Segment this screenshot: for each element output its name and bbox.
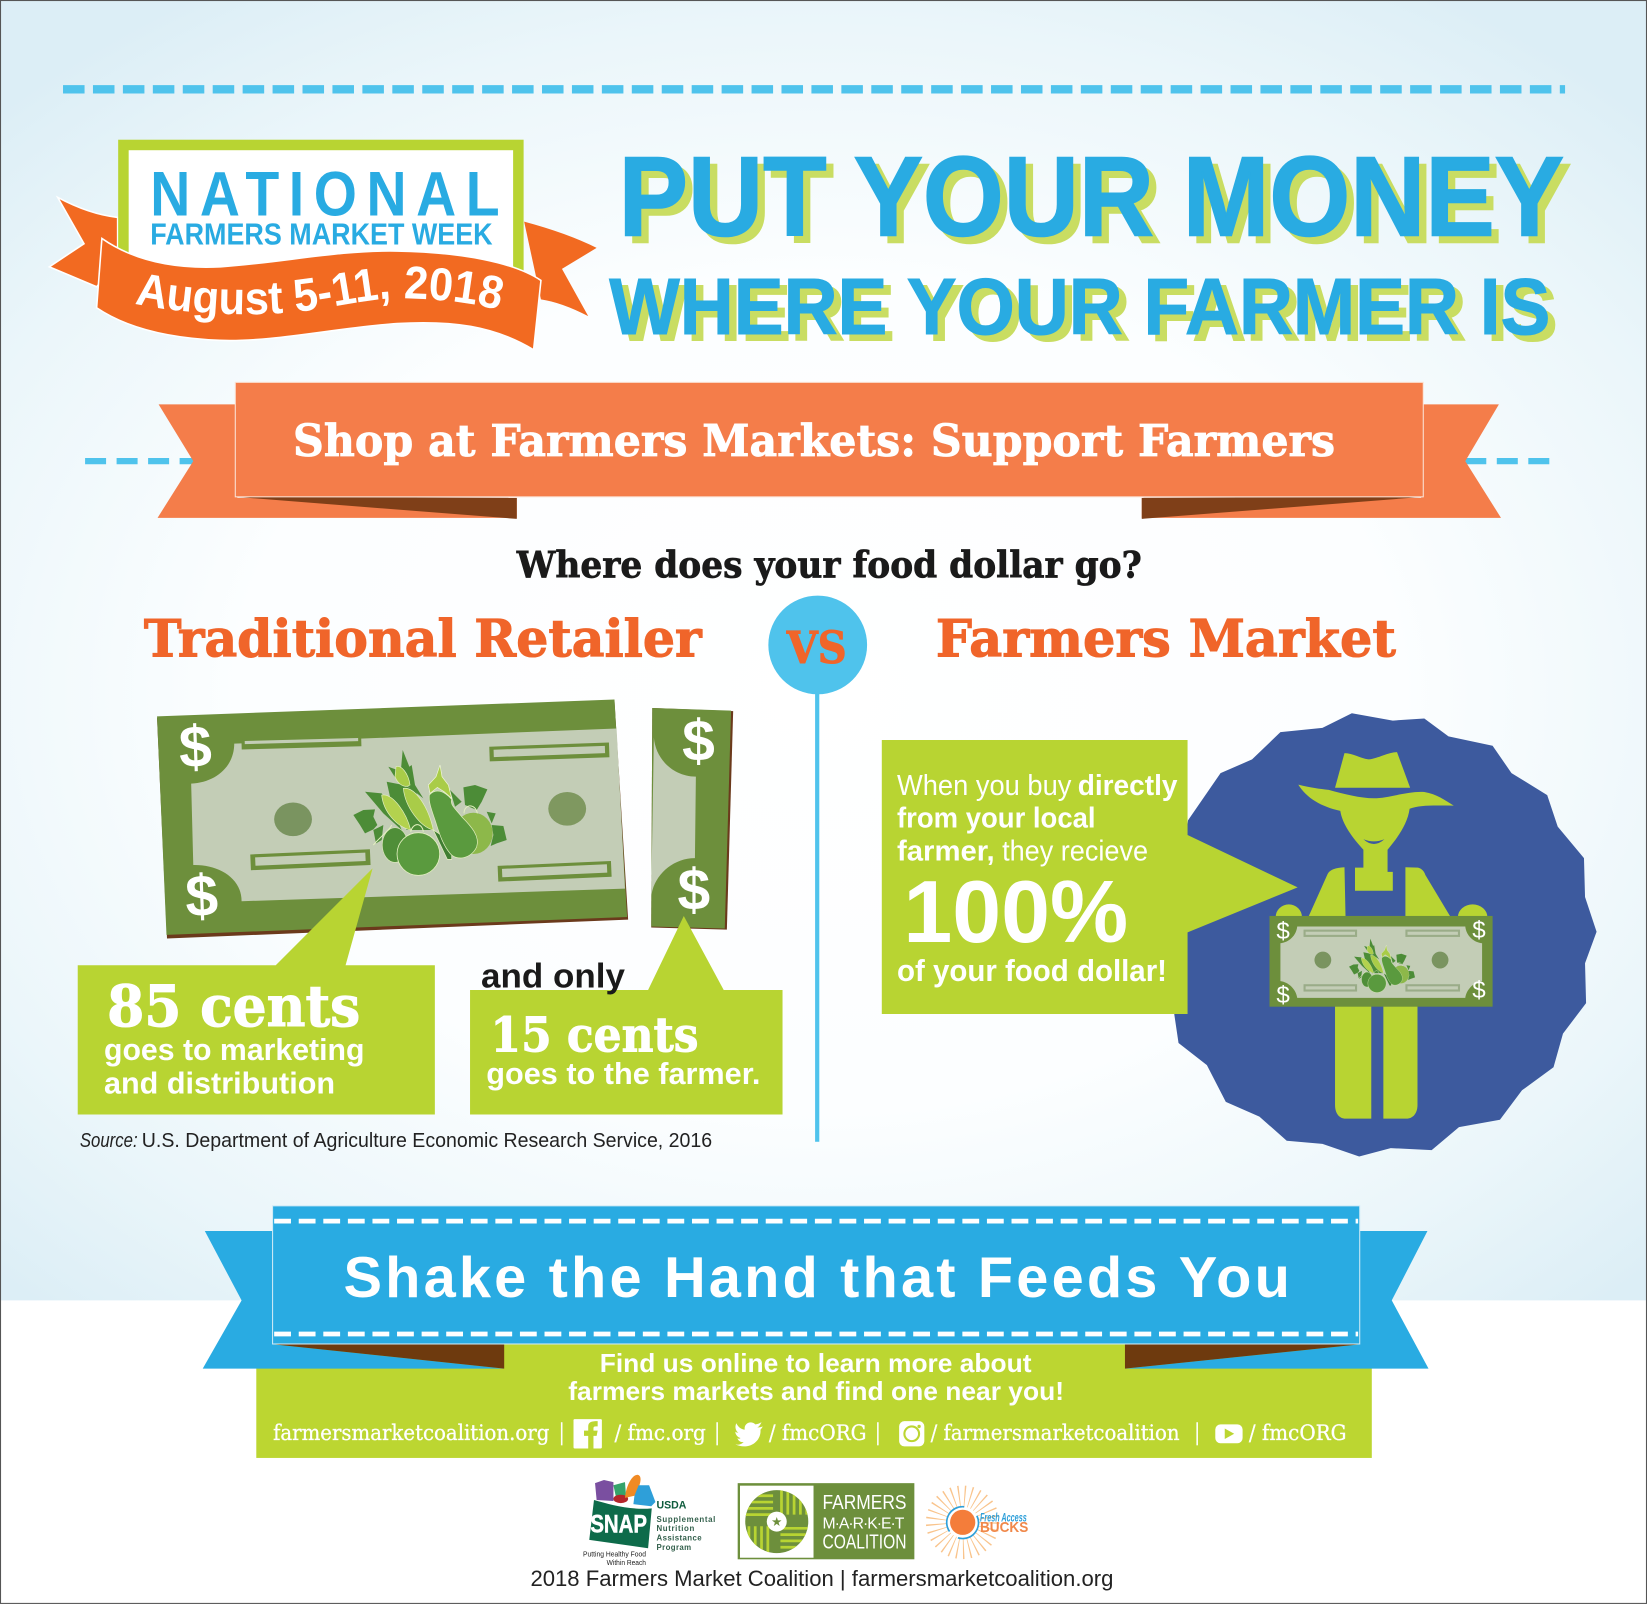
- dollar bill fragment: 15 cents: $: [678, 858, 710, 923]
- date ribbon: [97, 238, 541, 350]
- callout: 85 cents: [78, 868, 435, 1114]
- logo: SNAP: Assistance: [656, 1533, 702, 1542]
- logo: SNAP: Program: [656, 1543, 691, 1552]
- logo: SNAP: Putting Healthy Food: [583, 1550, 646, 1559]
- callout: 100%: When you buy: [897, 770, 1072, 802]
- held dollar bill: $: [1472, 917, 1486, 944]
- held dollar bill: $: [1472, 977, 1486, 1004]
- icon: facebook: [574, 1419, 602, 1448]
- callout: 100%: farmer,: [897, 835, 995, 867]
- held dollar bill: [1269, 916, 1493, 1009]
- banner text: Shake the Hand that Feeds You: [343, 1246, 1290, 1310]
- blue scalloped circle: [1174, 713, 1597, 1156]
- icon: vegetables: [353, 750, 507, 875]
- icon: instagram: [899, 1421, 924, 1446]
- lime footer panel: [256, 1344, 1372, 1458]
- icon: twitter: [735, 1422, 763, 1446]
- website link: farmersmarketcoalition.org: [273, 1421, 549, 1445]
- dollar bill fragment: 15 cents: $: [682, 708, 715, 773]
- date text: August 5-11, 2018: [136, 266, 503, 323]
- dollar bill: 85 cents: $: [184, 863, 219, 929]
- lime footer panel: / farmersmarketcoalition: [931, 1421, 1180, 1445]
- callout: 100%: of your food dollar!: [897, 954, 1167, 988]
- callout: 100%: from your local: [897, 803, 1096, 835]
- logo: SNAP: SNAP: [590, 1511, 647, 1539]
- callout: 100%: they recieve: [1002, 835, 1148, 867]
- dollar bill: 85 cents: $: [178, 714, 213, 780]
- footer credit: 2018 Farmers Market Coalition | farmersmarketcoalition.org: [530, 1566, 1113, 1591]
- callout: 100%: directly: [1078, 770, 1178, 802]
- logo: Farmers Market Coalition: [738, 1483, 914, 1559]
- banner text: Shop at Farmers Markets: Support Farmers: [293, 416, 1335, 467]
- title: PUT YOUR MONEY: [626, 141, 1571, 268]
- logo: Fresh Access Bucks: [937, 1497, 1029, 1548]
- lime footer panel: / fmc.org: [614, 1421, 706, 1445]
- heading: Farmers Market: Farmers Market: [936, 609, 1396, 669]
- logo: Fresh Access Bucks: BUCKS: [980, 1520, 1029, 1536]
- callout: 15 cents: 15 cents: [491, 1008, 699, 1063]
- logo: SNAP: Supplemental: [656, 1515, 715, 1524]
- blue banner: [203, 1206, 1429, 1369]
- farmer illustration: [1174, 713, 1597, 1156]
- callout: 15 cents: and only: [481, 957, 626, 995]
- lime footer panel: / fmcORG: [769, 1421, 867, 1445]
- dollar bill: 85 cents: [157, 700, 628, 939]
- logo: SNAP: Nutrition: [656, 1524, 694, 1533]
- question heading: Where does your food dollar go?: [516, 543, 1142, 587]
- title: WHERE YOUR FARMER IS: [617, 268, 1558, 357]
- dollar bill fragment: 15 cents: [651, 708, 733, 930]
- callout: 15 cents: goes to the farmer.: [486, 1057, 760, 1091]
- lime footer panel: farmers markets and find one near you!: [568, 1376, 1064, 1406]
- farmer figure: [1276, 752, 1487, 1119]
- heading: Traditional Retailer: Traditional Retailer: [144, 609, 703, 669]
- source: U.S. Department of Agriculture Economic Research Service, 2016: [142, 1129, 712, 1152]
- VS circle: VS: [786, 623, 847, 674]
- source: Source:: [80, 1129, 138, 1152]
- logo: Farmers Market Coalition: ★: [771, 1515, 782, 1529]
- lime footer panel: Find us online to learn more about: [600, 1348, 1032, 1378]
- badge subheading: FARMERS MARKET WEEK: [150, 218, 493, 252]
- callout: 85 cents: goes to marketing: [104, 1033, 364, 1067]
- divider line: [815, 683, 819, 1142]
- logo: SNAP: USDA: [656, 1499, 686, 1511]
- callout: 100%: 100%: [903, 862, 1128, 961]
- badge heading: NATIONAL: [150, 158, 500, 229]
- title: WHERE YOUR FARMER IS: [609, 262, 1550, 351]
- badge: National Farmers Market Week: [48, 140, 596, 348]
- callout: 100%: [882, 740, 1298, 1014]
- logo: Farmers Market Coalition: COALITION: [822, 1531, 906, 1553]
- logo: SNAP: [583, 1475, 715, 1567]
- orange banner: [158, 382, 1501, 519]
- callout: 85 cents: 85 cents: [107, 974, 360, 1040]
- logo: Farmers Market Coalition: M·A·R·K·E·T: [822, 1515, 905, 1532]
- logo: SNAP: Within Reach: [607, 1558, 646, 1567]
- lime footer panel: / fmcORG: [1249, 1421, 1347, 1445]
- held dollar bill: $: [1276, 982, 1290, 1009]
- icon: youtube: [1215, 1424, 1243, 1443]
- logo: Fresh Access Bucks: Fresh Access: [980, 1513, 1027, 1525]
- icon: smile: [1363, 839, 1384, 844]
- title: [609, 133, 1571, 357]
- callout: 15 cents: [470, 916, 783, 1114]
- logo: Farmers Market Coalition: FARMERS: [822, 1492, 906, 1514]
- callout: 85 cents: and distribution: [104, 1066, 335, 1100]
- title: PUT YOUR MONEY: [619, 133, 1564, 260]
- held dollar bill: $: [1276, 918, 1290, 945]
- VS circle: [768, 596, 867, 694]
